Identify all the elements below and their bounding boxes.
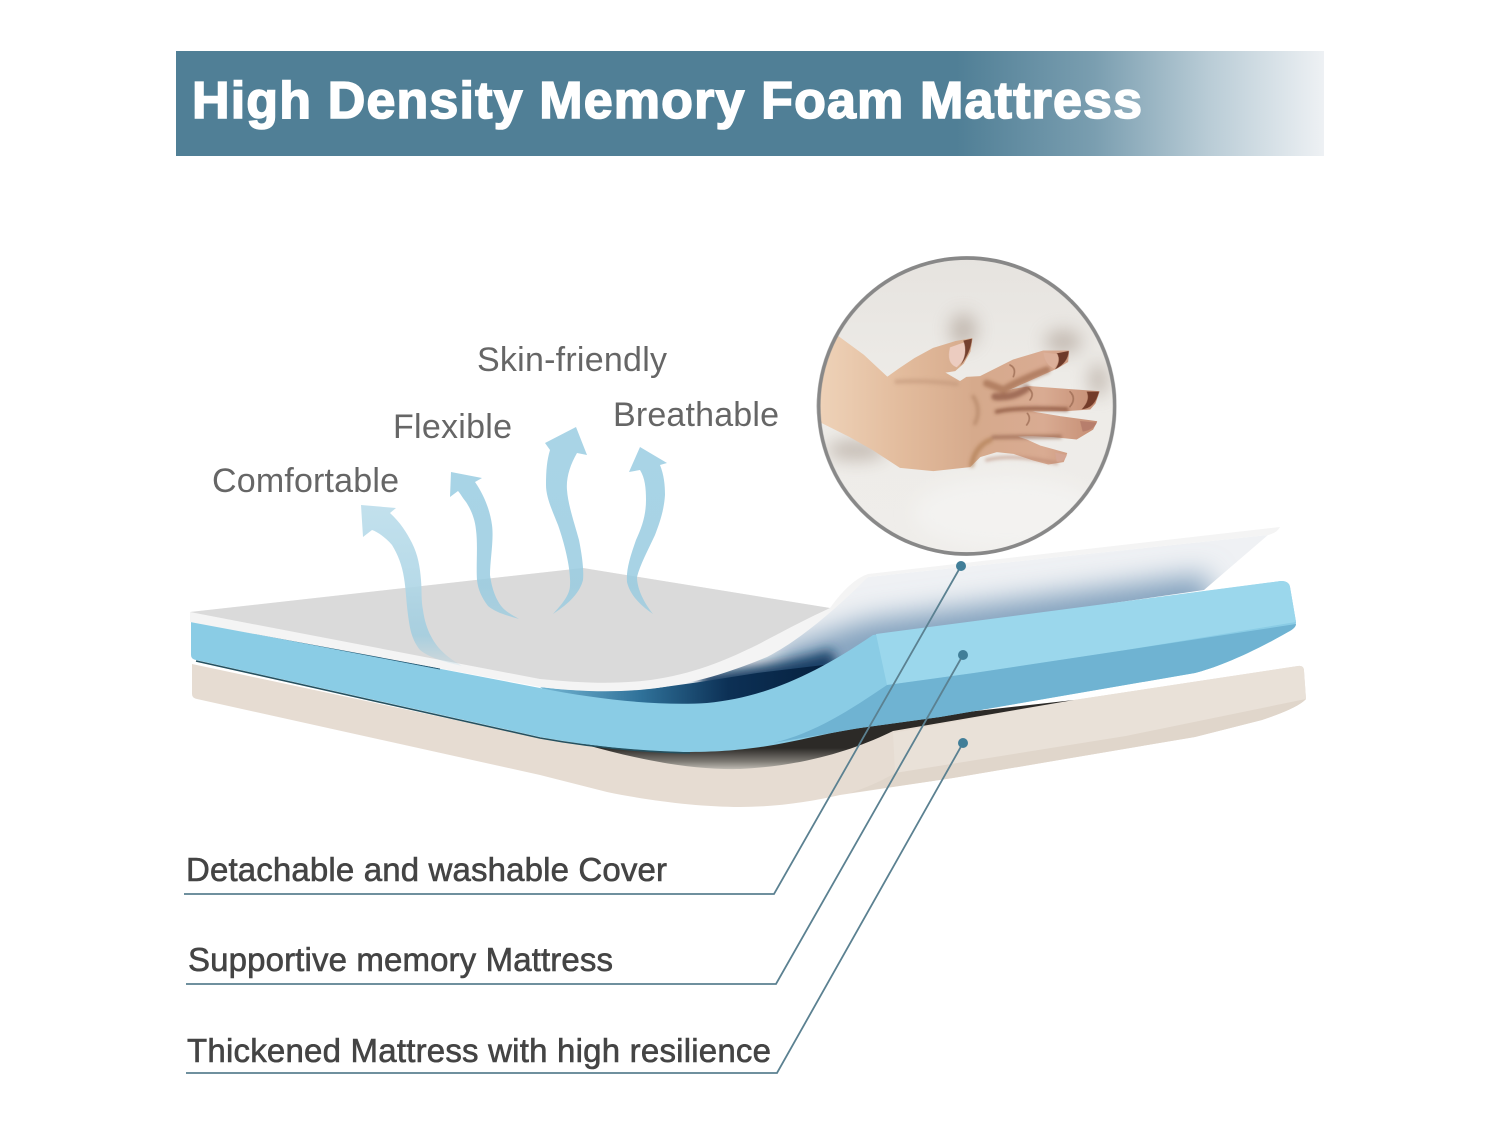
- foam highlight: [913, 477, 1100, 550]
- shadow between base and memory foam: [583, 700, 1074, 769]
- callout: detachable and washable cover: [184, 561, 966, 894]
- text: Comfortable: Comfortable: [212, 462, 399, 500]
- text: Skin-friendly: Skin-friendly: [477, 341, 667, 379]
- fingertips: [1055, 351, 1069, 369]
- label: Thickened Mattress with high resilience: [187, 1032, 771, 1069]
- arrow: flexible: [450, 472, 519, 619]
- leader line: [186, 655, 963, 984]
- breathable airflow arrows: [361, 427, 667, 666]
- mattress layers illustration: [190, 527, 1306, 807]
- layer: blue memory foam: [191, 581, 1296, 753]
- cover: white edge: [190, 527, 1280, 691]
- callout: thickened mattress: [186, 738, 968, 1073]
- arrow: skin-friendly: [545, 427, 587, 614]
- text: Flexible: Flexible: [393, 408, 512, 446]
- header banner: [176, 51, 1324, 156]
- arrow: breathable: [627, 447, 667, 614]
- foam shadows: [827, 313, 1108, 460]
- text: Breathable: Breathable: [613, 396, 779, 434]
- inset circle: hand pressing memory foam: [819, 258, 1115, 554]
- label: Supportive memory Mattress: [188, 941, 613, 978]
- cover underside, lifted: [640, 535, 1268, 690]
- title: High Density Memory Foam Mattress: [192, 72, 1142, 130]
- label: Detachable and washable Cover: [186, 851, 667, 888]
- hand shading: [897, 370, 1067, 465]
- leader line: [186, 743, 963, 1073]
- cover: gray top surface: [190, 568, 830, 683]
- leader line: [184, 566, 961, 894]
- hand: [820, 337, 1099, 471]
- knuckles: [1010, 365, 1073, 425]
- arrow: comfortable: [361, 505, 462, 666]
- callout: supportive memory mattress: [186, 650, 968, 984]
- layer: beige base: [192, 664, 1306, 807]
- dark gap under cover: [540, 664, 832, 715]
